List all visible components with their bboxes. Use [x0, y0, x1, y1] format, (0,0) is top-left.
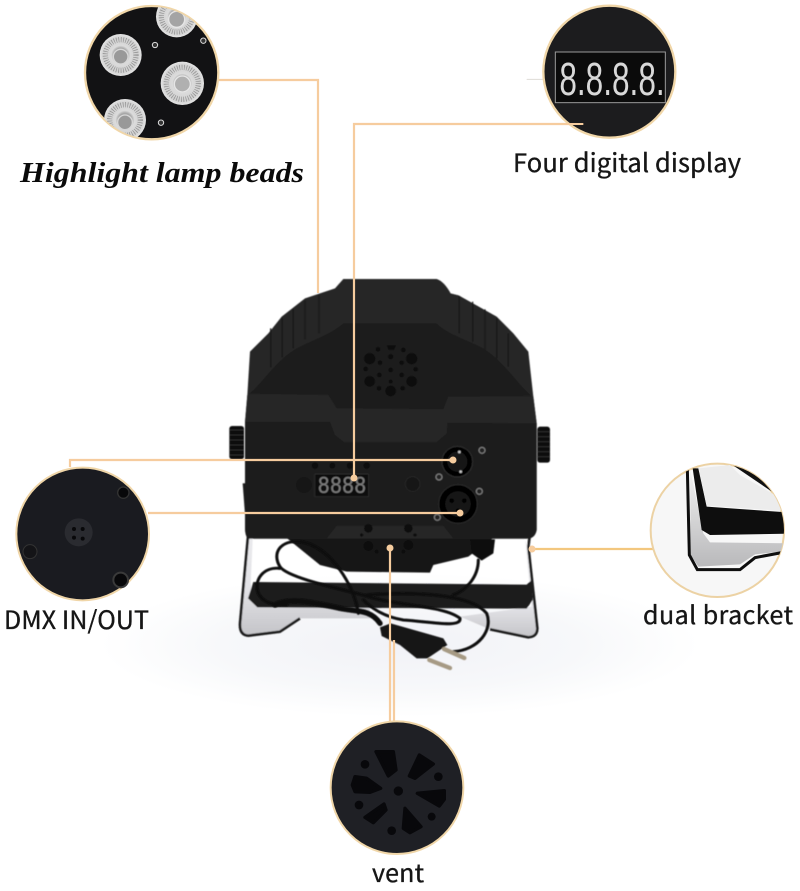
detail circle: vent — [331, 721, 463, 854]
line: lamp beads — [219, 80, 318, 293]
left knob — [229, 426, 244, 459]
small digital display: 8888 — [318, 474, 366, 501]
LED left — [100, 34, 142, 76]
arch face — [248, 323, 532, 409]
label: vent: vent — [372, 854, 425, 890]
bracket arms — [240, 483, 537, 637]
right knob — [537, 427, 550, 463]
lower vent — [360, 524, 417, 554]
control buttons — [312, 462, 370, 469]
upper housing and box — [245, 279, 537, 539]
cable gland — [470, 539, 495, 561]
power cable and plug — [257, 542, 488, 668]
callout dots — [350, 456, 536, 552]
heading: Highlight lamp beads: Highlight lamp beads — [19, 157, 304, 189]
line: vent — [390, 548, 394, 726]
speaker holes — [296, 477, 312, 493]
detail circle: four digital display — [500, 6, 675, 138]
XLR connector upper — [436, 446, 485, 480]
cable loops — [257, 542, 488, 652]
ledge and box face — [245, 422, 537, 539]
screws — [152, 38, 206, 125]
bottom plate of bracket — [248, 580, 533, 609]
callout lines — [70, 80, 656, 726]
detail circle: dual bracket — [651, 464, 787, 597]
detail circle: four digital display: 8.8.8.8. — [559, 53, 665, 105]
label: Four digital display: Four digital display — [513, 143, 741, 180]
detail circle: DMX IN/OUT — [16, 468, 149, 600]
line: dual bracket — [532, 548, 656, 550]
detail circle: lamp beads — [85, 0, 218, 141]
rear vent upper — [363, 345, 418, 396]
label: DMX IN/OUT: DMX IN/OUT — [4, 601, 149, 637]
lower housing — [285, 537, 495, 573]
LED bottom — [104, 99, 146, 141]
line: DMX upper — [70, 460, 453, 467]
product: rear view of par light — [229, 279, 550, 637]
line: DMX lower — [148, 512, 460, 514]
sensor — [405, 477, 420, 491]
XLR connector lower — [434, 485, 482, 523]
line: display — [354, 124, 583, 478]
power plug — [380, 623, 464, 668]
ribs — [271, 295, 508, 367]
LED top — [156, 7, 196, 38]
label: dual bracket: dual bracket — [643, 596, 794, 632]
LED right — [161, 62, 204, 105]
